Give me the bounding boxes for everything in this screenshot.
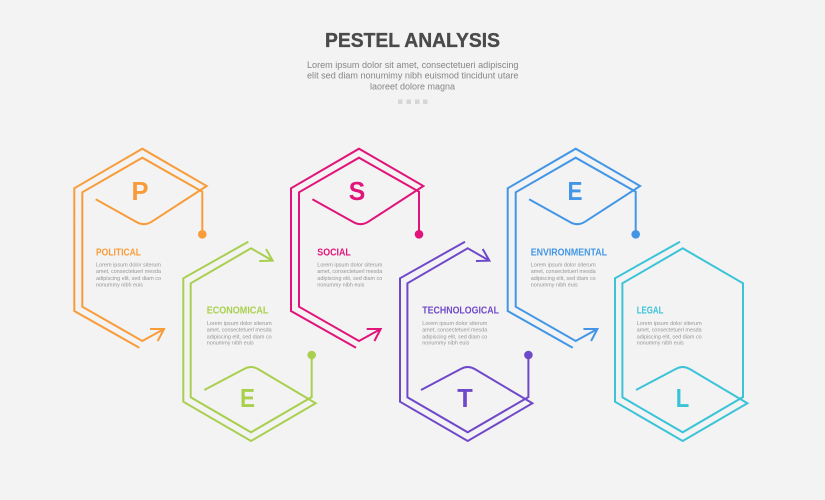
body: social: [317, 262, 383, 288]
letter E: E: [240, 385, 255, 413]
body: legal: Lorem ipsum dolor siterum: [637, 321, 702, 327]
hexagon outline: economical: [183, 242, 316, 441]
body: technological: nonummy nibh euis: [422, 341, 469, 347]
panel: technological: [400, 242, 533, 441]
body: political: adipiscing elit, sed diam co: [96, 276, 161, 282]
hexagon outline: environmental: [508, 149, 640, 348]
body: environmental: nonummy nibh euis: [531, 282, 578, 288]
letter L: L: [676, 385, 689, 413]
body: environmental: Lorem ipsum dolor siterum: [531, 262, 596, 268]
body: technological: amet, consectetuerl mesda: [422, 328, 488, 334]
title: PESTEL ANALYSIS: [325, 29, 500, 52]
body: legal: amet, consectetuerl mesda: [637, 328, 702, 334]
body: social: Lorem ipsum dolor siterum: [317, 262, 382, 268]
subtitle text: elit sed diam nonumimy nibh euismod tincidunt utare: [307, 71, 518, 82]
body: technological: adipiscing elit, sed diam co: [422, 334, 487, 340]
body: technological: [422, 321, 488, 347]
body: social: nonummy nibh euis: [317, 282, 364, 288]
hexagon outline: social: [291, 149, 423, 348]
body: economical: adipiscing elit, sed diam co: [207, 334, 272, 340]
panel: environmental: [508, 149, 640, 348]
letter S: S: [349, 178, 365, 206]
panel: economical: [183, 242, 316, 441]
subtitle text: [307, 60, 518, 92]
body: economical: [207, 321, 272, 347]
letter T: T: [457, 385, 473, 413]
body: social: adipiscing elit, sed diam co: [317, 276, 382, 282]
body: technological: Lorem ipsum dolor siterum: [422, 321, 487, 327]
hexagon outline: technological: [400, 242, 533, 441]
subtitle text: laoreet dolore magna: [370, 81, 456, 92]
subtitle text: Lorem ipsum dolor sit amet, consectetueri adipiscing: [307, 60, 518, 71]
body: environmental: [531, 262, 596, 288]
panel: legal: [615, 242, 747, 441]
body: political: Lorem ipsum dolor siterum: [96, 262, 161, 268]
body: social: amet, consectetuerl mesda: [317, 269, 383, 275]
letter P: P: [132, 178, 148, 206]
heading: social: SOCIAL: [317, 248, 351, 259]
heading: political: POLITICAL: [96, 248, 141, 259]
body: economical: Lorem ipsum dolor siterum: [207, 321, 272, 327]
body: economical: amet, consectetuerl mesda: [207, 328, 272, 334]
panel: social: [291, 149, 423, 348]
body: political: nonummy nibh euis: [96, 282, 143, 288]
heading: economical: ECONOMICAL: [207, 306, 268, 317]
hexagon outline: political: [74, 149, 207, 348]
body: environmental: amet, consectetuerl mesda: [531, 269, 596, 275]
letter E: E: [568, 178, 582, 206]
body: environmental: adipiscing elit, sed diam co: [531, 276, 596, 282]
body: legal: nonummy nibh euis: [637, 341, 684, 347]
body: legal: [637, 321, 702, 347]
hexagon outline: legal: [615, 242, 747, 441]
heading: legal: LEGAL: [637, 306, 663, 317]
pagination dots: [398, 100, 428, 104]
panel: political: [74, 149, 207, 348]
body: political: [96, 262, 162, 288]
body: economical: nonummy nibh euis: [207, 341, 254, 347]
heading: technological: TECHNOLOGICAL: [422, 306, 499, 317]
heading: environmental: ENVIRONMENTAL: [531, 248, 607, 259]
body: legal: adipiscing elit, sed diam co: [637, 334, 702, 340]
body: political: amet, consectetuerl mesda: [96, 269, 162, 275]
